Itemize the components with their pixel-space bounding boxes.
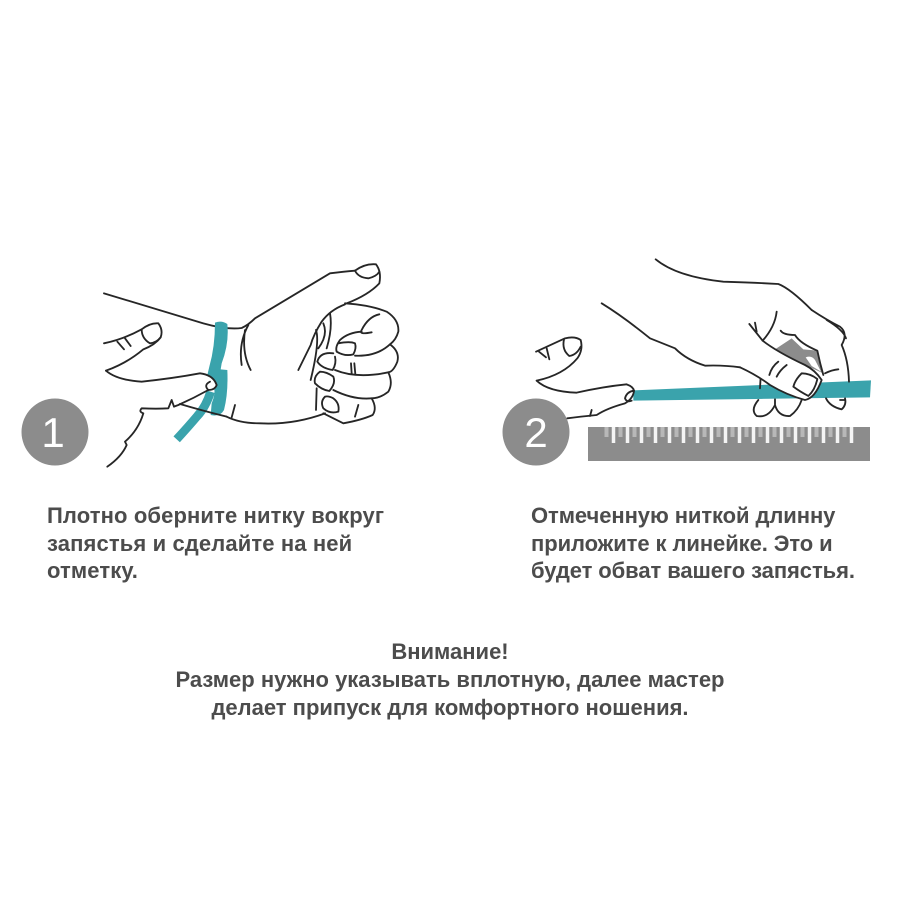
grey ribbon [775, 338, 823, 373]
upper hand [656, 259, 812, 310]
text: step 2 instructions: будет обват вашего запястья. [531, 558, 855, 583]
icon: step 1 wrist with thread [104, 264, 398, 467]
icon: step 2 hands with thread [536, 259, 871, 418]
fist [298, 264, 398, 423]
text: step 1 instructions: запястья и сделайте на ней [47, 530, 352, 556]
text: step 2 instructions [531, 503, 855, 583]
arm and wrist outline [104, 271, 355, 328]
text: step 1 instructions: отметку. [47, 558, 138, 583]
lower hand [536, 337, 581, 381]
fingers behind thread [781, 331, 823, 375]
white gap in ribbon [806, 357, 821, 372]
text: step 1 instructions: Плотно оберните нитку вокруг [47, 503, 384, 528]
text: attention note: Внимание! [391, 639, 509, 664]
thread and gripping hand [104, 322, 228, 467]
icon: step 1 badge [22, 398, 88, 466]
text: step 2 instructions: Отмеченную ниткой длинну [531, 503, 835, 528]
thread [207, 322, 228, 416]
text: step 1 instructions [47, 503, 384, 583]
icon: step 2 ruler [588, 427, 870, 461]
pinching thumb [740, 341, 822, 400]
thumb tip over thread [197, 374, 217, 395]
text: attention note [176, 639, 724, 720]
icon: step 2 badge [502, 398, 570, 466]
thread strip [633, 380, 871, 401]
text: attention note: делает припуск для комфортного ношения. [211, 695, 689, 720]
icon: step 2 badge: 2 [524, 409, 548, 456]
text: attention note: Размер нужно указывать вплотную, далее мастер [176, 667, 724, 692]
icon: step 1 badge: 1 [41, 409, 65, 456]
text: step 2 instructions: приложите к линейке. Это и [531, 530, 833, 556]
